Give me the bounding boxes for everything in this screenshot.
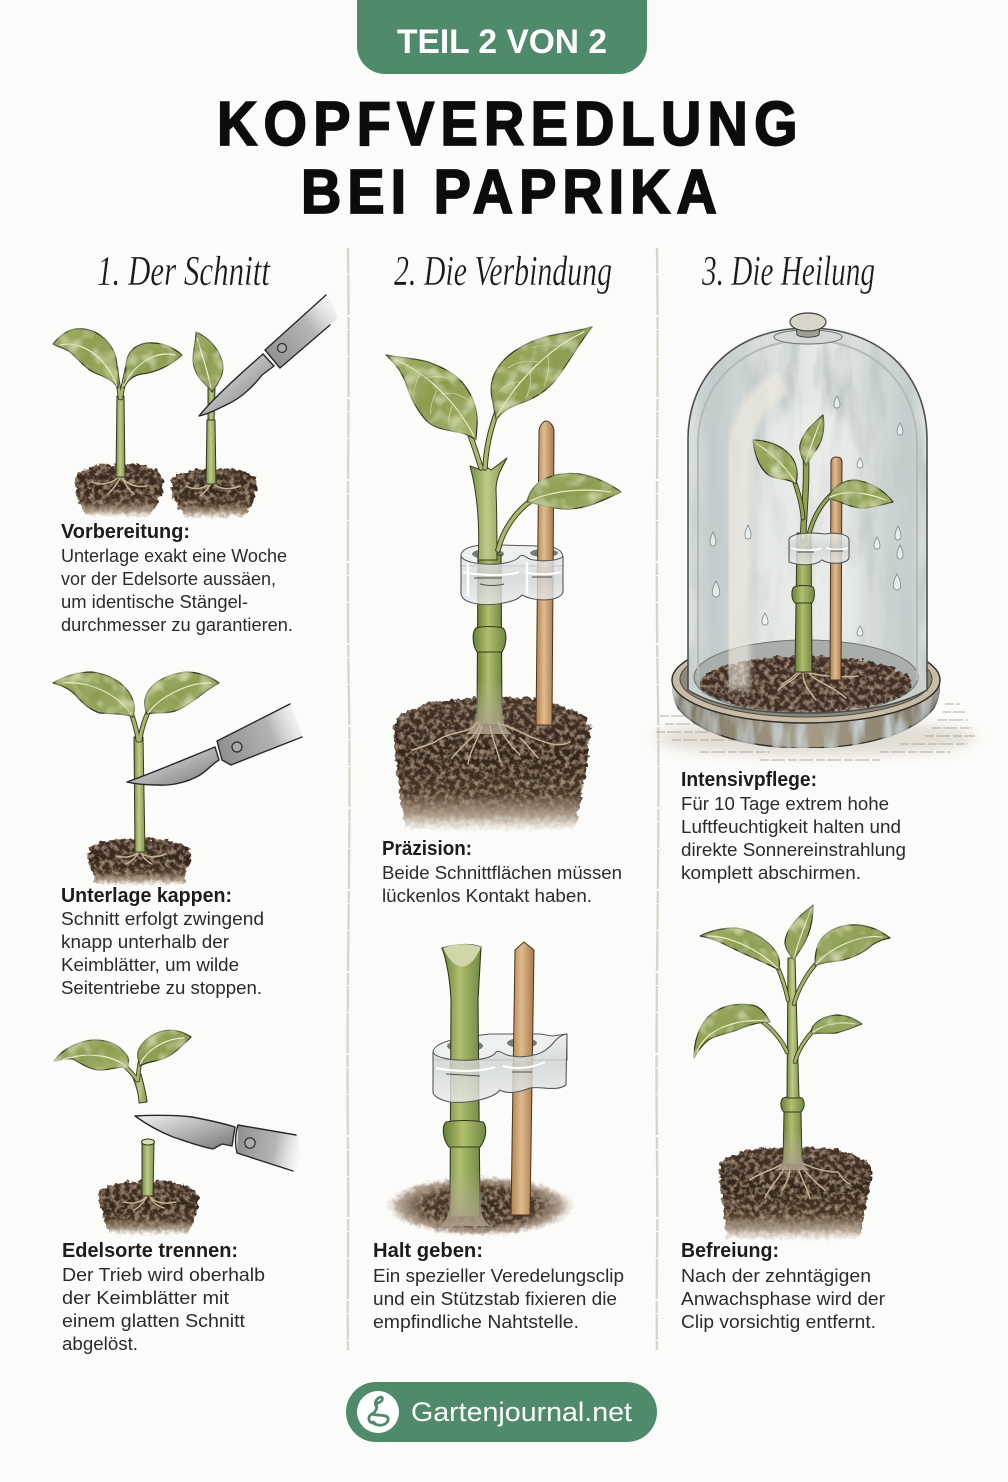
text: Vorbereitung: um identische Stängel- <box>61 592 248 612</box>
text: Vorbereitung: Vorbereitung: <box>61 521 190 543</box>
text: Präzision <box>382 838 622 906</box>
clip front <box>461 555 563 605</box>
stem base fade <box>466 680 512 734</box>
inner dome line <box>698 340 917 680</box>
stem <box>442 944 481 1217</box>
roots <box>116 852 166 864</box>
text: Befreiung <box>681 1240 885 1332</box>
knife <box>135 1115 302 1172</box>
icon: sprout logo <box>357 1391 399 1433</box>
stem <box>134 737 145 852</box>
text: Unterlage kappen: Unterlage kappen: <box>61 885 232 907</box>
droplets <box>710 396 903 636</box>
knob <box>774 313 842 344</box>
clip front <box>433 1034 567 1102</box>
petioles <box>131 712 148 740</box>
stake <box>536 421 554 725</box>
main stem lower <box>477 555 502 725</box>
tray <box>672 680 940 748</box>
clip top face and holes <box>461 545 563 566</box>
side petiole <box>498 500 532 550</box>
ground mound <box>386 1176 574 1236</box>
illustration: close-up of clip and stake <box>386 942 574 1236</box>
heading: 2. Die Verbindung: 2. Die Verbindung <box>394 249 612 295</box>
glass highlight band <box>738 383 785 690</box>
small clip <box>789 533 849 565</box>
soil block <box>394 697 590 831</box>
text: Vorbereitung: vor der Edelsorte aussäen, <box>61 569 276 589</box>
stem upper <box>470 458 507 560</box>
soil plug <box>99 1181 199 1235</box>
stem lower <box>783 1110 802 1165</box>
dome outline <box>688 328 927 713</box>
cut surface <box>443 944 481 967</box>
text: Unterlage kappen: knapp unterhalb der <box>61 932 229 952</box>
inner glass rim <box>694 640 918 714</box>
roots <box>124 1196 176 1210</box>
text: Vorbereitung: Unterlage exakt eine Woche <box>61 546 287 566</box>
heading: 3. Die Heilung: 3. Die Heilung <box>701 249 875 295</box>
header tab: Teil 2 von 2: TEIL 2 VON 2 <box>397 23 607 61</box>
knife <box>199 293 338 416</box>
roots <box>412 722 570 764</box>
text: Befreiung: Anwachsphase wird der <box>681 1289 885 1309</box>
graft collar <box>473 626 506 652</box>
text: Vorbereitung <box>61 521 293 635</box>
text: Edelsorte trennen: einem glatten Schnitt <box>62 1311 245 1331</box>
illustration: grafted plant with clip and stake <box>386 327 621 831</box>
ground shading <box>655 704 975 760</box>
text: Intensivpflege: Luftfeuchtigkeit halten und <box>681 817 901 837</box>
text: Vorbereitung: durchmesser zu garantieren. <box>61 615 293 635</box>
knife <box>127 703 303 785</box>
text: Präzision: Präzision: <box>382 838 472 860</box>
footer badge: Gartenjournal.net: Gartenjournal.net <box>411 1397 633 1427</box>
text: Intensivpflege: direkte Sonnereinstrahlung <box>681 840 906 860</box>
seedling stem right <box>206 420 216 484</box>
roots <box>750 1162 850 1198</box>
roots <box>778 672 858 700</box>
header tab: Teil 2 von 2 <box>357 0 647 74</box>
illustration: finished plant after clip removal <box>694 905 890 1240</box>
leaves <box>53 672 219 717</box>
petioles <box>760 965 815 1062</box>
illustration: plant under glass dome <box>655 313 975 760</box>
text: Präzision: lückenlos Kontakt haben. <box>382 886 592 906</box>
text: Befreiung: Clip vorsichtig entfernt. <box>681 1312 876 1332</box>
text: Halt geben: empfindliche Nahtstelle. <box>373 1312 579 1332</box>
leaves <box>694 905 890 1058</box>
tray rim <box>672 637 940 723</box>
leaves left seedling <box>53 329 182 388</box>
stake <box>511 942 534 1215</box>
leaves <box>54 1030 191 1070</box>
title: KOPFVEREDLUNG <box>217 90 798 159</box>
text: Befreiung: Nach der zehntägigen <box>681 1266 871 1286</box>
text: Edelsorte trennen: abgelöst. <box>62 1334 138 1354</box>
upper stem and petioles <box>803 462 806 540</box>
illustration: two seedlings with knife <box>53 293 338 518</box>
illustration: separating the scion <box>54 1030 302 1235</box>
plant stem <box>795 533 812 672</box>
dome back glass <box>688 328 927 713</box>
text: Präzision: Beide Schnittflächen müssen <box>382 863 622 883</box>
text: Halt geben: Halt geben: <box>373 1240 483 1262</box>
text: Edelsorte trennen: der Keimblätter mit <box>62 1288 229 1308</box>
soil inside dome <box>700 656 912 712</box>
text: Unterlage kappen: Keimblätter, um wilde <box>61 955 239 975</box>
text: Edelsorte trennen: Der Trieb wird oberhalb <box>62 1265 265 1285</box>
stem fade at the base <box>440 1170 490 1226</box>
text: Intensivpflege: Intensivpflege: <box>681 769 817 791</box>
graft collar <box>792 586 814 603</box>
title <box>217 90 798 227</box>
text: Intensivpflege <box>681 769 906 883</box>
leaves <box>753 415 893 508</box>
leaf right seedling <box>193 332 223 392</box>
text: Unterlage kappen <box>61 885 264 998</box>
soil plug <box>88 838 192 886</box>
roots <box>92 476 240 496</box>
soil plug right <box>171 468 257 518</box>
text: Halt geben <box>373 1240 624 1332</box>
text: Intensivpflege: Für 10 Tage extrem hohe <box>681 794 889 814</box>
stump <box>142 1142 154 1196</box>
text: Unterlage kappen: Schnitt erfolgt zwingend <box>61 909 264 929</box>
leaves <box>386 327 621 509</box>
stake <box>830 457 842 680</box>
text: Edelsorte trennen: Edelsorte trennen: <box>62 1240 238 1262</box>
text: Halt geben: Ein spezieller Veredelungsclip <box>373 1266 624 1286</box>
footer badge: Gartenjournal.net <box>346 1382 657 1442</box>
title: BEI PAPRIKA <box>301 158 717 227</box>
stem upper <box>787 958 799 1098</box>
soil block <box>719 1147 871 1240</box>
text: Befreiung: Befreiung: <box>681 1240 779 1262</box>
heading: 1. Der Schnitt: 1. Der Schnitt <box>97 249 271 295</box>
clip top <box>433 1034 567 1060</box>
collar <box>781 1096 804 1112</box>
soil plug left <box>75 464 163 517</box>
text: Edelsorte trennen <box>62 1240 265 1354</box>
text: Unterlage kappen: Seitentriebe zu stoppen. <box>61 978 262 998</box>
petioles <box>116 368 127 398</box>
text: Intensivpflege: komplett abschirmen. <box>681 863 861 883</box>
text: Halt geben: und ein Stützstab fixieren die <box>373 1289 617 1309</box>
seedling stem left <box>116 396 125 477</box>
graft collar <box>443 1120 486 1147</box>
cut scion stem <box>133 1074 147 1103</box>
illustration: capping the rootstock <box>53 672 303 886</box>
centre brightness <box>758 405 860 650</box>
